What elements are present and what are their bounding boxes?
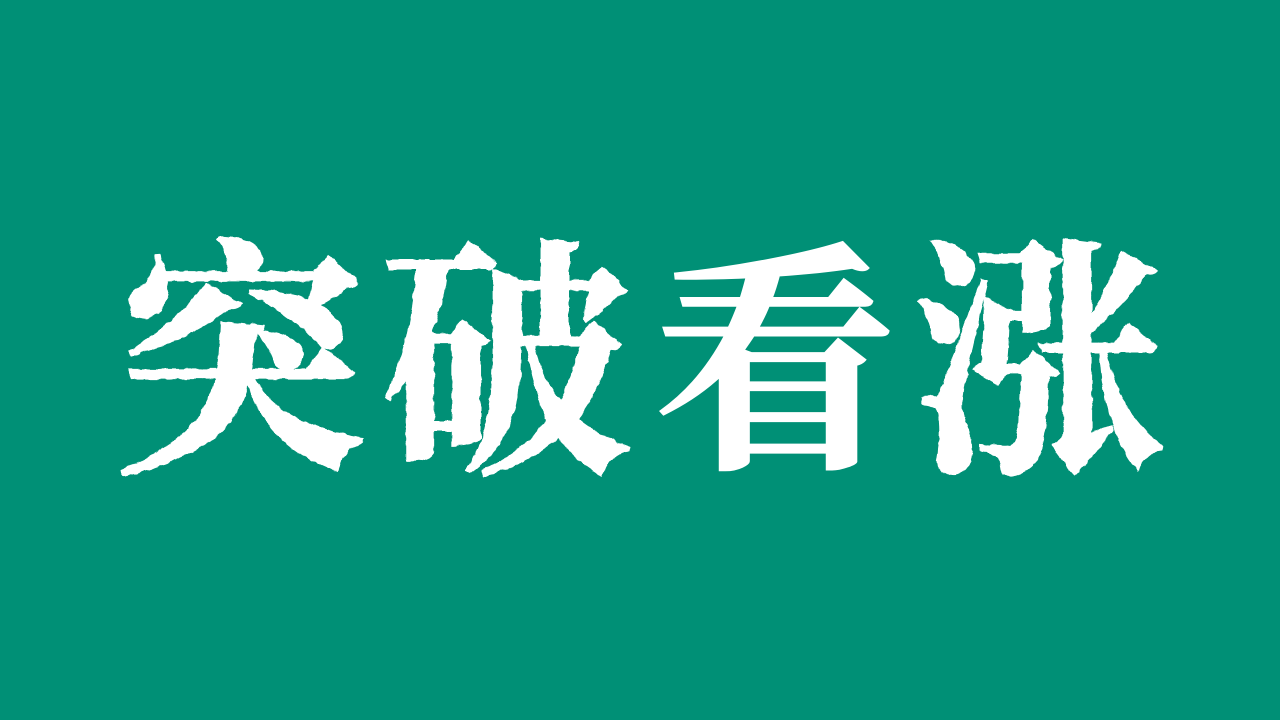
title <box>114 227 1166 507</box>
title: 突 <box>114 227 366 507</box>
title: 看 <box>654 233 896 501</box>
title: 涨 <box>914 227 1166 507</box>
title: 破 <box>380 227 632 507</box>
